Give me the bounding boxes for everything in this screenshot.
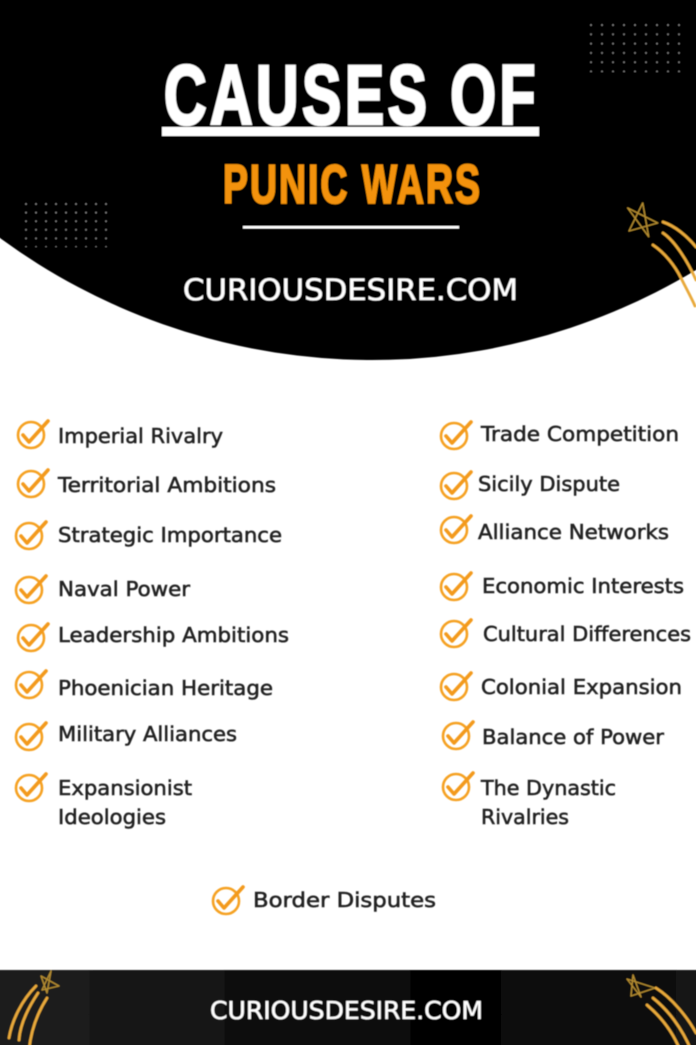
item: trade competition — [441, 422, 679, 449]
item: imperial rivalry — [18, 421, 223, 448]
subtitle: punic wars: PUNIC WARS — [223, 153, 482, 215]
item: territorial ambitions: Territorial Ambitions — [57, 473, 276, 497]
item: cultural differences: Cultural Differences — [483, 622, 691, 646]
item: economic interests: Economic Interests — [482, 574, 684, 598]
icon: shooting star footer right — [627, 975, 696, 1045]
cause list: left column — [16, 421, 289, 829]
item: naval power — [16, 576, 191, 603]
item: balance of power: Balance of Power — [482, 725, 665, 749]
website label: footer: CURIOUSDESIRE.COM — [210, 996, 483, 1025]
item: phoenician heritage: Phoenician Heritage — [58, 676, 273, 700]
item: economic interests — [441, 573, 684, 600]
item: territorial ambitions — [18, 470, 276, 497]
dot pattern: left — [25, 203, 108, 247]
panel: black header shape — [0, 0, 696, 360]
title: causes of: CAUSES OF — [164, 48, 539, 142]
icon: shooting star top right — [628, 203, 696, 306]
item: military alliances: Military Alliances — [58, 722, 237, 746]
item: balance of power — [443, 722, 665, 749]
item: expansionist ideologies — [16, 774, 192, 829]
icon: shooting star footer left — [9, 971, 59, 1045]
panel: footer bar — [0, 970, 696, 1045]
item: phoenician heritage — [16, 671, 273, 700]
item: sicily dispute — [441, 472, 620, 499]
item: border disputes — [213, 887, 436, 914]
item: imperial rivalry: Imperial Rivalry — [58, 424, 223, 448]
cause list: right column — [441, 422, 691, 829]
item: sicily dispute: Sicily Dispute — [478, 472, 620, 496]
item: the dynastic rivalries: The Dynastic — [480, 776, 616, 800]
divider line under subtitle — [243, 226, 459, 228]
item: trade competition: Trade Competition — [480, 422, 679, 446]
item: military alliances — [16, 722, 237, 750]
title underline — [162, 127, 539, 136]
item: expansionist ideologies: Expansionist — [58, 776, 192, 800]
item: strategic importance: Strategic Importance — [58, 523, 282, 547]
item: the dynastic rivalries — [443, 773, 616, 829]
item: leadership ambitions — [18, 623, 289, 651]
item: colonial expansion — [441, 673, 682, 700]
item: expansionist ideologies: Ideologies — [58, 805, 166, 829]
item: naval power: Naval Power — [58, 577, 191, 601]
item: border disputes: Border Disputes — [253, 888, 436, 912]
item: the dynastic rivalries: Rivalries — [481, 805, 569, 829]
dot pattern: top right — [590, 24, 681, 72]
item: alliance networks: Alliance Networks — [478, 520, 669, 544]
website label: header: CURIOUSDESIRE.COM — [183, 273, 518, 307]
item: leadership ambitions: Leadership Ambitions — [58, 623, 289, 647]
item: colonial expansion: Colonial Expansion — [481, 675, 682, 699]
item: alliance networks — [441, 516, 669, 544]
